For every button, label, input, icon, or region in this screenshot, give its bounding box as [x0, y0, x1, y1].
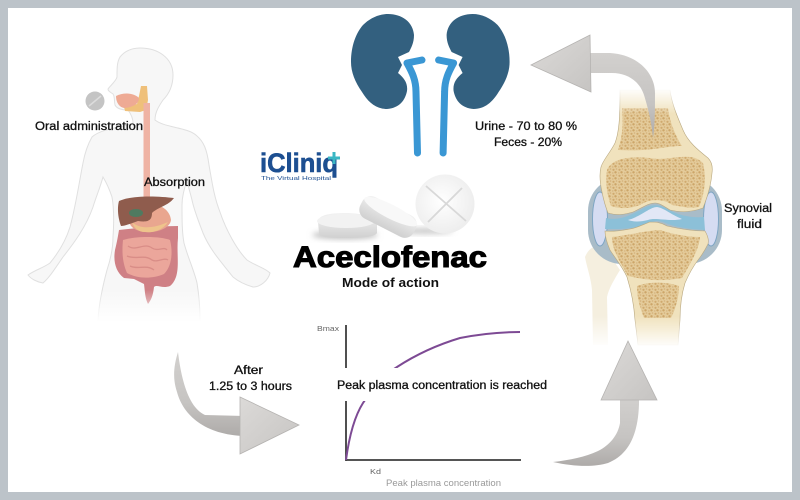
title: Aceclofenac — [293, 241, 487, 274]
tibia lower spongy bone — [637, 283, 679, 318]
arrow: joint to kidneys — [531, 35, 655, 138]
bottom fade — [585, 316, 690, 348]
upright scored tablet — [416, 174, 474, 234]
tilted tablet — [356, 192, 421, 241]
logo cross — [328, 152, 340, 164]
excretion text: Urine - 70 to 80 % — [475, 121, 577, 133]
excretion text — [475, 121, 577, 149]
femur upper spongy bone — [618, 108, 682, 150]
arrow: plasma to joint — [553, 341, 657, 466]
tibia — [605, 222, 708, 345]
inner stomach band — [132, 222, 168, 232]
illustration: kidneys — [351, 14, 510, 153]
caption mask — [330, 368, 555, 401]
illustration: tablets — [312, 174, 474, 241]
body silhouette — [28, 48, 270, 320]
left ureter — [407, 60, 422, 153]
caption: Peak plasma concentration is reached — [337, 380, 547, 392]
left kidney — [351, 14, 414, 109]
label: synovial fluid — [724, 203, 772, 231]
label: synovial fluid: Synovial — [724, 203, 772, 215]
mouth — [116, 94, 139, 108]
right ureter — [439, 60, 454, 153]
label: synovial fluid: fluid — [737, 219, 762, 231]
x axis title: Peak plasma concentration — [386, 478, 501, 489]
chart: plasma concentration curve — [317, 324, 555, 489]
illustration: human body with digestive tract — [20, 48, 280, 322]
label: oral administration: Oral administration — [35, 121, 143, 133]
lower body fade — [20, 290, 280, 322]
synovial fluid — [628, 207, 682, 222]
salivary glands — [124, 86, 148, 112]
arrow: absorption to plasma curve — [174, 352, 299, 454]
flat tablet — [318, 213, 377, 238]
subtitle: Mode of action — [342, 275, 439, 290]
gallbladder — [129, 209, 143, 217]
tibia spongy bone — [612, 230, 700, 280]
icon: oral tablet — [86, 92, 104, 110]
logo: iCliniq: The Virtual Hospital — [261, 176, 331, 182]
label: absorption: Absorption — [144, 177, 205, 189]
saturation curve — [346, 332, 520, 460]
illustration: knee joint — [585, 88, 722, 348]
label: time to peak: After — [234, 365, 263, 377]
right kidney — [447, 14, 510, 109]
excretion text: Feces - 20% — [494, 137, 562, 149]
top fade — [610, 88, 680, 114]
logo: iCliniq: iCliniq — [260, 148, 338, 178]
stomach — [130, 205, 171, 232]
joint capsule — [588, 177, 722, 264]
femur — [600, 90, 712, 215]
liver — [118, 196, 174, 226]
femur spongy bone — [606, 157, 705, 208]
label: time to peak: 1.25 to 3 hours — [209, 381, 292, 393]
small intestine — [122, 237, 172, 278]
x axis — [346, 459, 521, 461]
label: time to peak — [209, 365, 292, 393]
y axis label: Bmax — [317, 324, 339, 333]
large intestine — [114, 226, 178, 304]
intestinal coils — [127, 246, 168, 270]
y axis — [345, 325, 347, 461]
cartilage and synovial space — [605, 205, 705, 230]
left synovial pocket — [592, 192, 608, 246]
fibula — [585, 247, 620, 345]
esophagus — [144, 103, 150, 198]
right synovial pocket — [704, 192, 718, 246]
x tick label: Kd — [370, 467, 381, 476]
